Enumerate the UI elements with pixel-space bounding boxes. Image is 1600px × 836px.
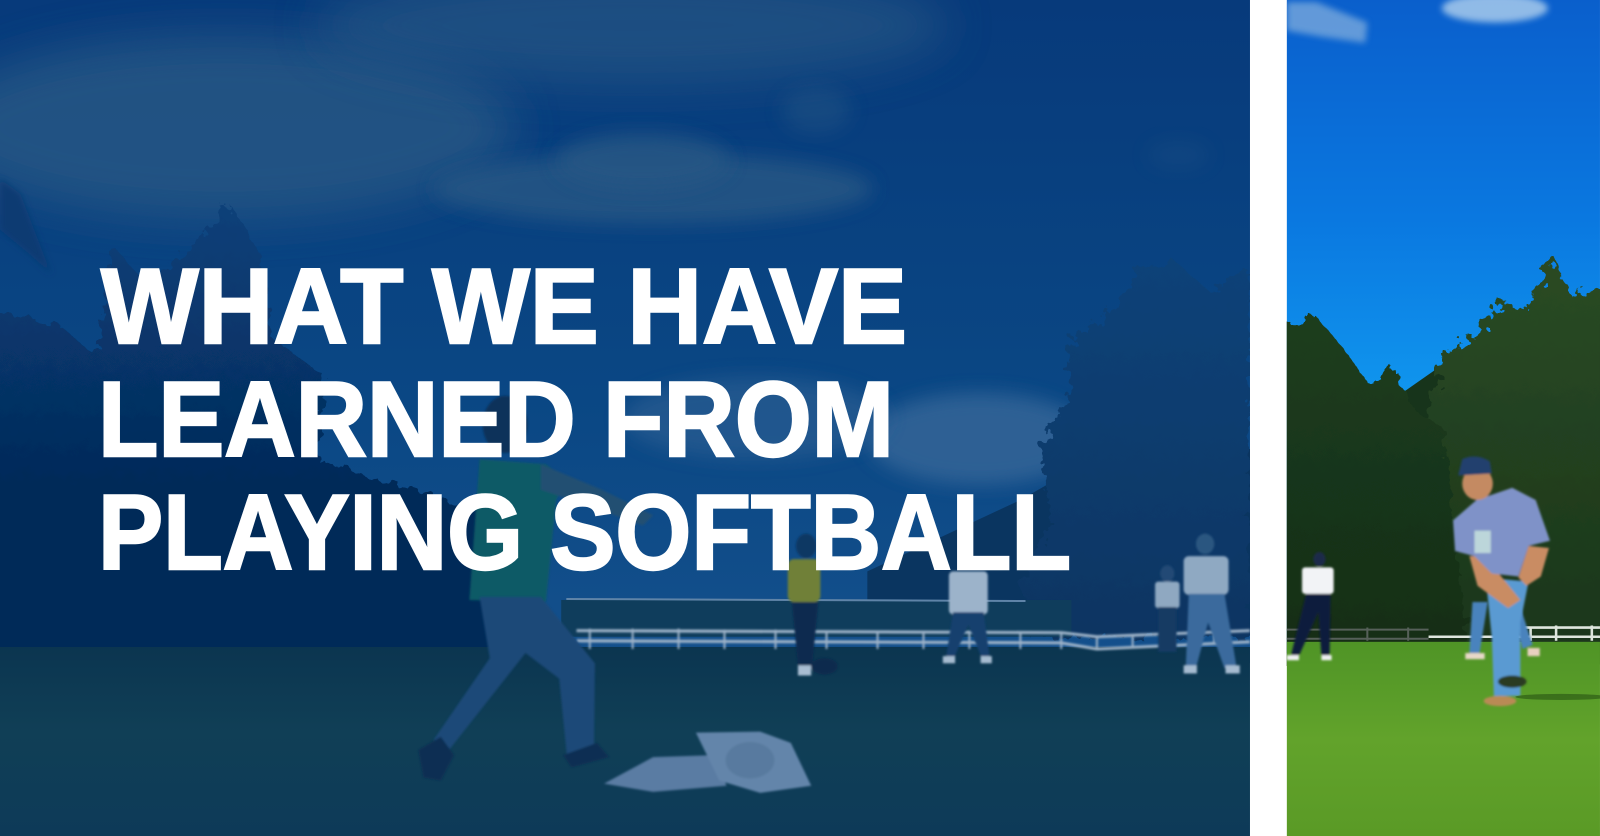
player in yellow shirt	[788, 534, 838, 676]
palm fronds top left	[0, 181, 46, 266]
sky	[0, 0, 1250, 663]
batter head	[483, 396, 528, 453]
mountain and trees	[1405, 370, 1445, 418]
grass	[0, 647, 1250, 836]
title	[98, 246, 1071, 592]
spectator in white shirt	[1287, 552, 1334, 660]
right tree	[1020, 260, 1250, 638]
batter shirt	[469, 459, 566, 602]
batter shoes	[418, 737, 609, 781]
clouds	[0, 0, 1209, 485]
far field	[561, 600, 1071, 637]
pitcher jeans	[1486, 578, 1529, 696]
pitcher shadow	[1515, 694, 1600, 700]
pitcher forearm left	[1469, 556, 1520, 608]
white fence	[1429, 626, 1600, 641]
pitcher back shoe	[1498, 676, 1527, 688]
left fir tree	[1265, 316, 1469, 663]
panel: softball pitcher photo	[1265, 0, 1600, 836]
right fir tree	[1408, 255, 1600, 663]
pitcher front shoe	[1484, 696, 1516, 706]
pitcher forearm right	[1518, 546, 1549, 586]
left palms and dark tree mass	[0, 204, 500, 658]
grass field	[1287, 642, 1600, 836]
wispy clouds	[1287, 0, 1548, 43]
player behind pitcher	[1465, 602, 1540, 659]
title: WHAT WE HAVE	[101, 246, 907, 366]
batter arm	[541, 464, 653, 526]
player in white shirt	[943, 571, 992, 663]
far rail	[566, 599, 1026, 601]
pitcher cap	[1458, 457, 1492, 476]
pitcher shirt	[1453, 488, 1550, 577]
blue sky	[1287, 0, 1600, 653]
panel: blue tinted softball photo	[0, 0, 1250, 836]
hill	[867, 449, 1250, 633]
dark fence	[1287, 628, 1429, 641]
plastic bags	[604, 732, 811, 793]
pitcher head	[1462, 467, 1493, 500]
title: PLAYING SOFTBALL	[98, 472, 1071, 592]
batter	[418, 396, 653, 781]
title: LEARNED FROM	[98, 359, 894, 479]
batter jeans	[434, 597, 595, 760]
pitcher	[1453, 457, 1550, 706]
two distant players	[1155, 534, 1240, 673]
pitcher badge	[1474, 531, 1491, 553]
white fence	[577, 629, 1250, 650]
